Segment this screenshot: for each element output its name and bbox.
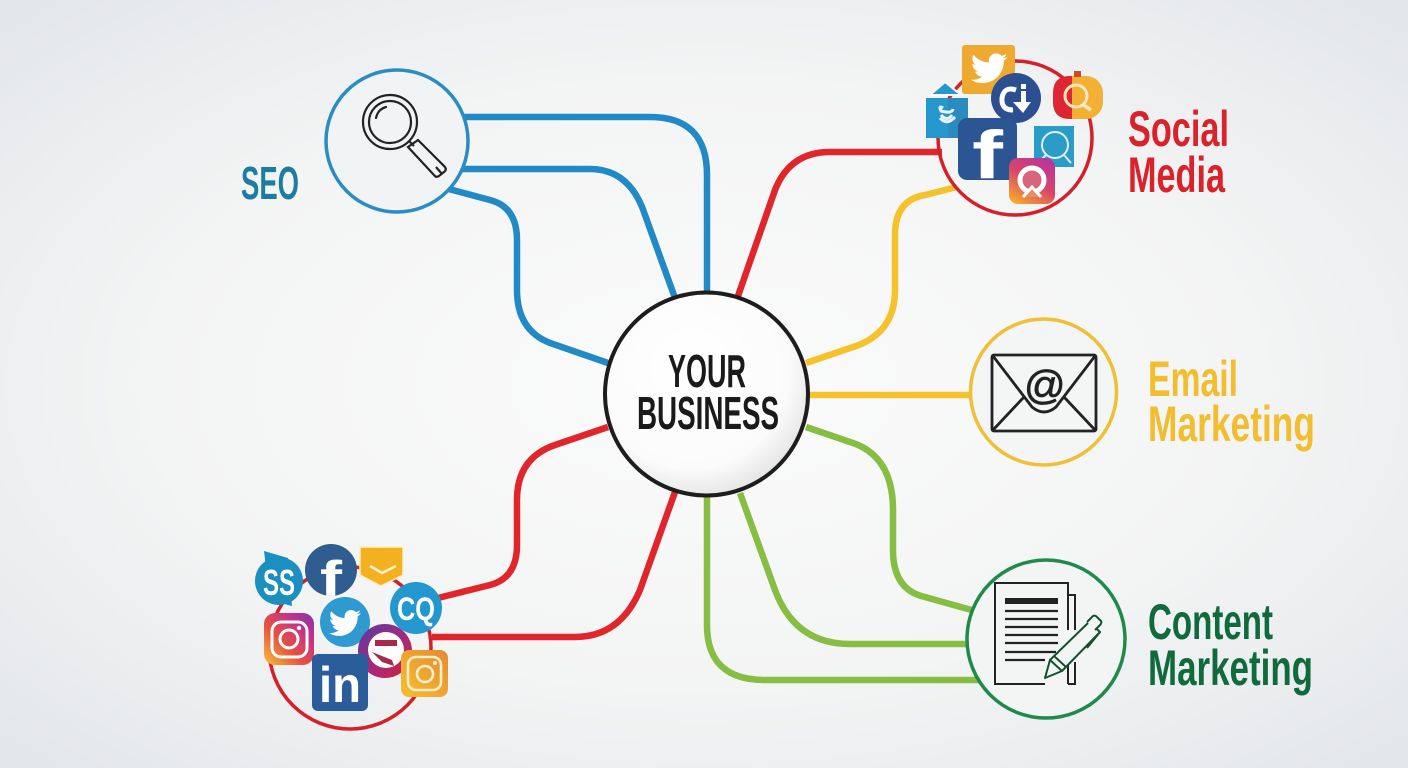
connectors: Social Media (red and yellow): [738, 152, 957, 363]
icon: twitter square: [962, 45, 1015, 94]
heading: Content Marketing: [1148, 594, 1313, 696]
icon: pen: [1045, 616, 1101, 678]
heading: Social Media: Media: [1128, 147, 1226, 203]
heading: Email Marketing: [1148, 351, 1315, 452]
bottom-left social icon cluster: [255, 544, 448, 729]
heading: Social Media: Social: [1128, 101, 1229, 157]
central hub: Your Business: BUSINESS: [637, 387, 779, 439]
Email Marketing node with envelope icon: [970, 319, 1116, 465]
icon: instagram gradient: [264, 613, 314, 665]
icon: orange instagram: [401, 650, 448, 697]
icon: red and orange search tile: [1053, 71, 1103, 119]
icon: facebook circle: f: [320, 551, 342, 607]
central hub: Your Business: YOUR: [668, 345, 746, 397]
SEO node with magnifier icon: [326, 70, 468, 212]
heading: Email Marketing: Marketing: [1148, 396, 1315, 452]
Social Media node with icon cluster: [926, 45, 1103, 215]
icon: linkedin square: in: [319, 657, 361, 713]
connector: Email Marketing (yellow): [810, 392, 975, 398]
icon: facebook square: f: [972, 117, 1003, 193]
connectors: bottom-left social cluster (red): [432, 427, 675, 637]
heading: Content Marketing: Marketing: [1148, 640, 1313, 696]
icon: facebook circle: [305, 544, 357, 607]
heading: Social Media: [1128, 101, 1229, 203]
icon: document: [995, 583, 1075, 684]
icon: blue circle with Q: [390, 582, 442, 634]
central hub: Your Business: [605, 292, 808, 496]
icon: blue circle with Q: CQ: [397, 591, 435, 627]
Content Marketing node with document icon: [967, 560, 1125, 718]
connectors: Content Marketing (green): [707, 427, 980, 680]
icon: twitter circle: [320, 597, 370, 647]
icon: magnifying glass: [363, 95, 446, 177]
icon: facebook square: [958, 117, 1017, 193]
icon: yellow pennant: [360, 547, 403, 586]
icon: blue circle with arrow glyph: [991, 73, 1041, 123]
heading: Email Marketing: Email: [1148, 351, 1238, 407]
heading: SEO: SEO: [241, 157, 299, 209]
heading: Content Marketing: Content: [1148, 594, 1273, 650]
icon: envelope with at sign: [992, 355, 1096, 431]
icon: blue search tile: [1034, 126, 1074, 167]
icon: blue speech bubble: SS: [263, 562, 295, 603]
connectors: SEO (blue): [445, 117, 707, 363]
icon: purple and red circle: [358, 624, 412, 678]
icon: home-shaped blue tile: [926, 82, 968, 138]
icon: envelope with at sign: @: [1024, 362, 1066, 408]
icon: instagram-like gradient tile: [1009, 158, 1055, 204]
icon: blue speech bubble: [255, 551, 303, 606]
